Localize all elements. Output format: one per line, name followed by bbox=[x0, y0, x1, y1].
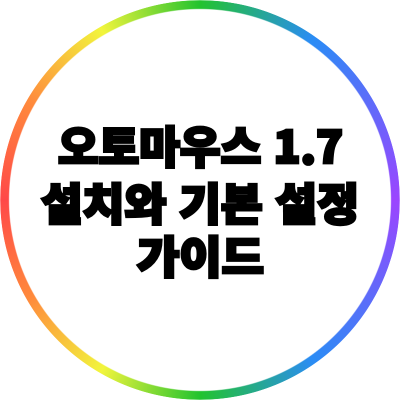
title line 3: 가이드 bbox=[137, 222, 264, 286]
title line 2: 설치와 기본 설정 bbox=[41, 169, 359, 233]
title line 1: 오토마우스 1.7 bbox=[58, 112, 343, 176]
